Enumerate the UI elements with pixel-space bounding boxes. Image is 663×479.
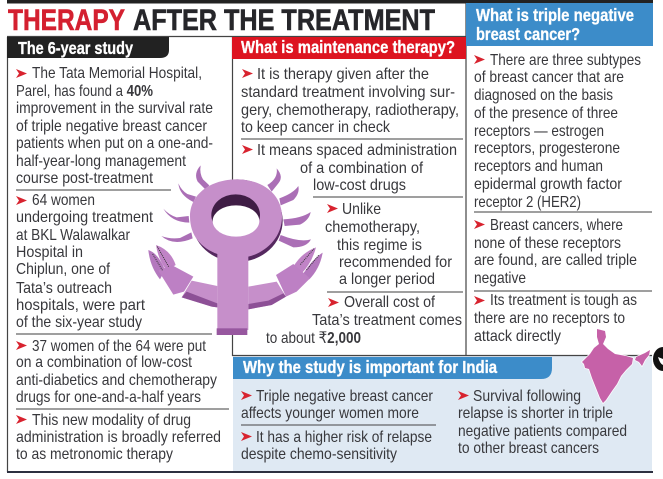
text block: why important right: to other breast cancers <box>458 440 599 457</box>
text block: why important right: Survival following <box>473 388 581 405</box>
text block: 6-year study: of triple negative breast cancer <box>16 118 208 135</box>
text block: maintenance therapy: to keep cancer in check <box>241 119 391 136</box>
text block: why important right: negative patients compared <box>458 423 627 440</box>
text block: triple negative: epidermal growth factor <box>474 176 623 193</box>
text block: 6-year study: on a combination of low-cost <box>16 354 192 371</box>
text block: 6-year study: half-year-long management <box>16 153 186 170</box>
text block: 6-year study: drugs for one-and-a-half years <box>16 389 201 406</box>
text block: 6-year study: patients when put on a one-and- <box>16 135 213 152</box>
text block: triple negative: are found, are called triple <box>474 252 637 269</box>
ring and stem <box>192 179 283 262</box>
text block: maintenance therapy: of a combination of <box>300 160 423 177</box>
text block: 6-year study: This new modality of drug <box>32 412 191 429</box>
text block: maintenance therapy: recommended for <box>339 254 453 271</box>
text block: maintenance therapy: gery, chemotherapy, radiotherapy, <box>241 102 459 119</box>
heading: the 6-year study: The 6-year study <box>18 38 133 58</box>
text block: 6-year study: 64 women <box>32 192 95 209</box>
text block: triple negative: diagnosed on the basis <box>474 87 613 104</box>
text block: 6-year study: Parel, has found a 40% <box>16 83 153 100</box>
icon: venus symbol with crab claws <box>148 165 323 335</box>
text block: triple negative: receptors, progesterone <box>474 140 620 157</box>
text block: maintenance therapy: Overall cost of <box>344 294 435 311</box>
text block: triple negative: attack directly <box>474 328 561 345</box>
text block: 6-year study: hospitals, were part <box>16 297 146 314</box>
text block: maintenance therapy: to about ₹2,000 <box>266 330 361 347</box>
icon: twitter badge <box>653 347 663 371</box>
text block: maintenance therapy: chemotherapy, <box>325 219 420 236</box>
text block: triple negative: negative <box>474 270 526 287</box>
text block: triple negative <box>474 52 652 345</box>
text block: 6-year study: 37 women of the 64 were put <box>32 338 206 355</box>
text block: triple negative: none of these receptors <box>474 235 621 252</box>
text block: why important right <box>458 388 627 457</box>
text block: triple negative: Its treatment is tough as <box>490 292 637 309</box>
left claw <box>148 245 217 307</box>
text block: 6-year study: anti-diabetics and chemotherapy <box>16 372 217 389</box>
text block: maintenance therapy: this regime is <box>337 237 422 254</box>
text block: 6-year study: undergoing treatment <box>16 209 153 226</box>
text block: why important left: affects younger women more <box>241 405 419 422</box>
text block: triple negative: Breast cancers, where <box>490 217 623 234</box>
bottom rule <box>7 471 653 473</box>
text block: maintenance therapy: It is therapy given after the <box>257 66 429 83</box>
text block: triple negative: of breast cancer that are <box>474 69 624 86</box>
text block: 6-year study: improvement in the survival rate <box>16 100 213 117</box>
text block: 6-year study: Chiplun, one of <box>16 261 110 278</box>
text block: triple negative: there are no receptors to <box>474 310 625 327</box>
text block: why important left: It has a higher risk of relapse <box>256 429 432 446</box>
text block: why important left: Triple negative breast cancer <box>256 388 434 405</box>
text block: maintenance therapy: a longer period <box>339 271 435 288</box>
text block: maintenance therapy: It means spaced administration <box>257 142 457 159</box>
text block: maintenance therapy: standard treatment involving sur- <box>241 84 455 101</box>
text block: 6-year study: The Tata Memorial Hospital, <box>32 65 202 82</box>
text block: triple negative: receptor 2 (HER2) <box>474 194 581 211</box>
text block: 6-year study: to as metronomic therapy <box>16 446 173 463</box>
title: THERAPY <box>8 4 125 37</box>
icon: India map <box>582 329 650 403</box>
heading: what is triple negative breast cancer: What is triple negative <box>476 5 634 25</box>
legs (upper) <box>196 165 209 189</box>
text block: maintenance therapy <box>241 66 463 347</box>
text block: maintenance therapy: Unlike <box>342 201 381 218</box>
panel: lower blue background <box>233 356 652 472</box>
right claw <box>248 247 323 309</box>
text block: 6-year study: at BKL Walawalkar <box>16 227 131 244</box>
heading: why the study is important for India: Why the study is important for India <box>243 357 497 377</box>
text block: maintenance therapy: Tata’s treatment comes <box>312 312 462 329</box>
top bar <box>7 0 653 4</box>
heading: what is triple negative breast cancer: breast cancer? <box>476 24 580 44</box>
text block: why important left: despite chemo-sensitivity <box>241 446 397 463</box>
text block: 6-year study <box>16 65 229 463</box>
text block: 6-year study: Tata’s outreach <box>16 280 112 297</box>
text block: triple negative: receptors and human <box>474 158 603 175</box>
text block: triple negative: receptors — estrogen <box>474 123 604 140</box>
text block: 6-year study: administration is broadly referred <box>16 429 221 446</box>
text block: 6-year study: of the six-year study <box>16 314 142 331</box>
text block: 6-year study: Hospital in <box>16 244 83 261</box>
title <box>8 4 435 37</box>
text block: why important right: relapse is shorter in triple <box>458 405 613 422</box>
text block: why important left <box>241 388 436 463</box>
heading: what is maintenance therapy: What is maintenance therapy? <box>241 37 455 57</box>
text block: triple negative: of the presence of three <box>474 105 618 122</box>
heading: what is triple negative breast cancer <box>466 3 653 46</box>
text block: 6-year study: course post-treatment <box>16 170 153 187</box>
title: AFTER THE TREATMENT <box>133 4 435 37</box>
text block: maintenance therapy: low-cost drugs <box>313 177 406 194</box>
